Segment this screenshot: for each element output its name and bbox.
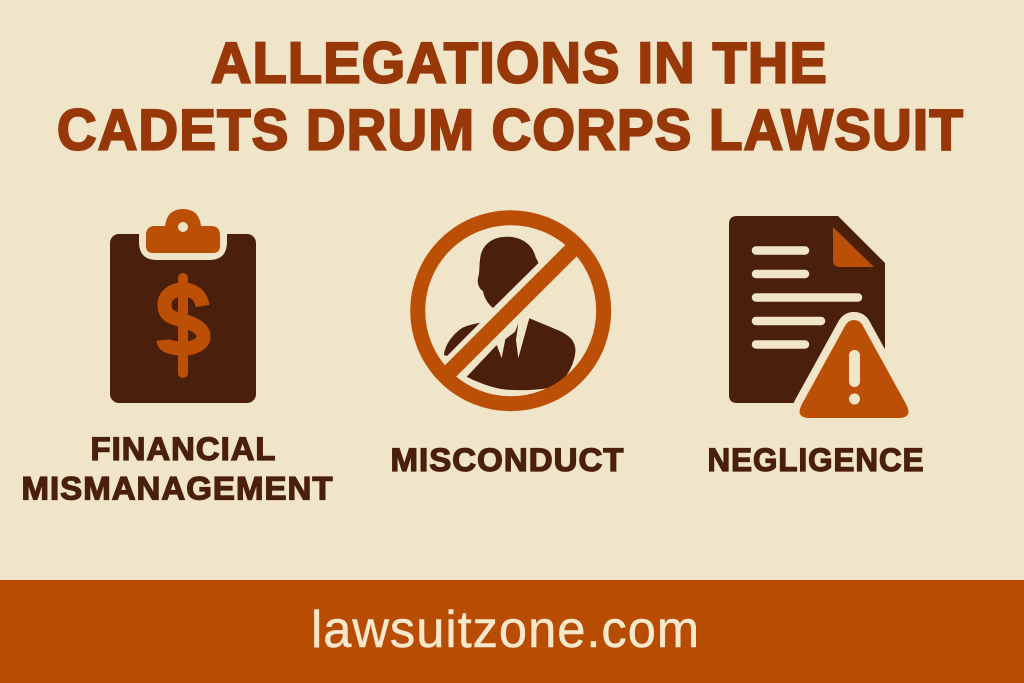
footer website text: lawsuitzone.com — [311, 601, 700, 659]
label: misconduct: MISCONDUCT — [390, 442, 624, 478]
label: financial mismanagement: MISMANAGEMENT — [22, 470, 334, 506]
icon: no person symbol — [418, 218, 604, 404]
footer band — [0, 580, 1024, 683]
icon: clipboard with dollar sign — [110, 209, 256, 403]
label: negligence: NEGLIGENCE — [708, 442, 924, 478]
icon: document with warning triangle — [729, 216, 908, 418]
title: CADETS DRUM CORPS LAWSUIT — [57, 98, 964, 162]
label: financial mismanagement: FINANCIAL — [90, 431, 276, 467]
label: financial mismanagement — [22, 431, 334, 506]
title — [57, 32, 964, 162]
title: ALLEGATIONS IN THE — [211, 32, 828, 96]
